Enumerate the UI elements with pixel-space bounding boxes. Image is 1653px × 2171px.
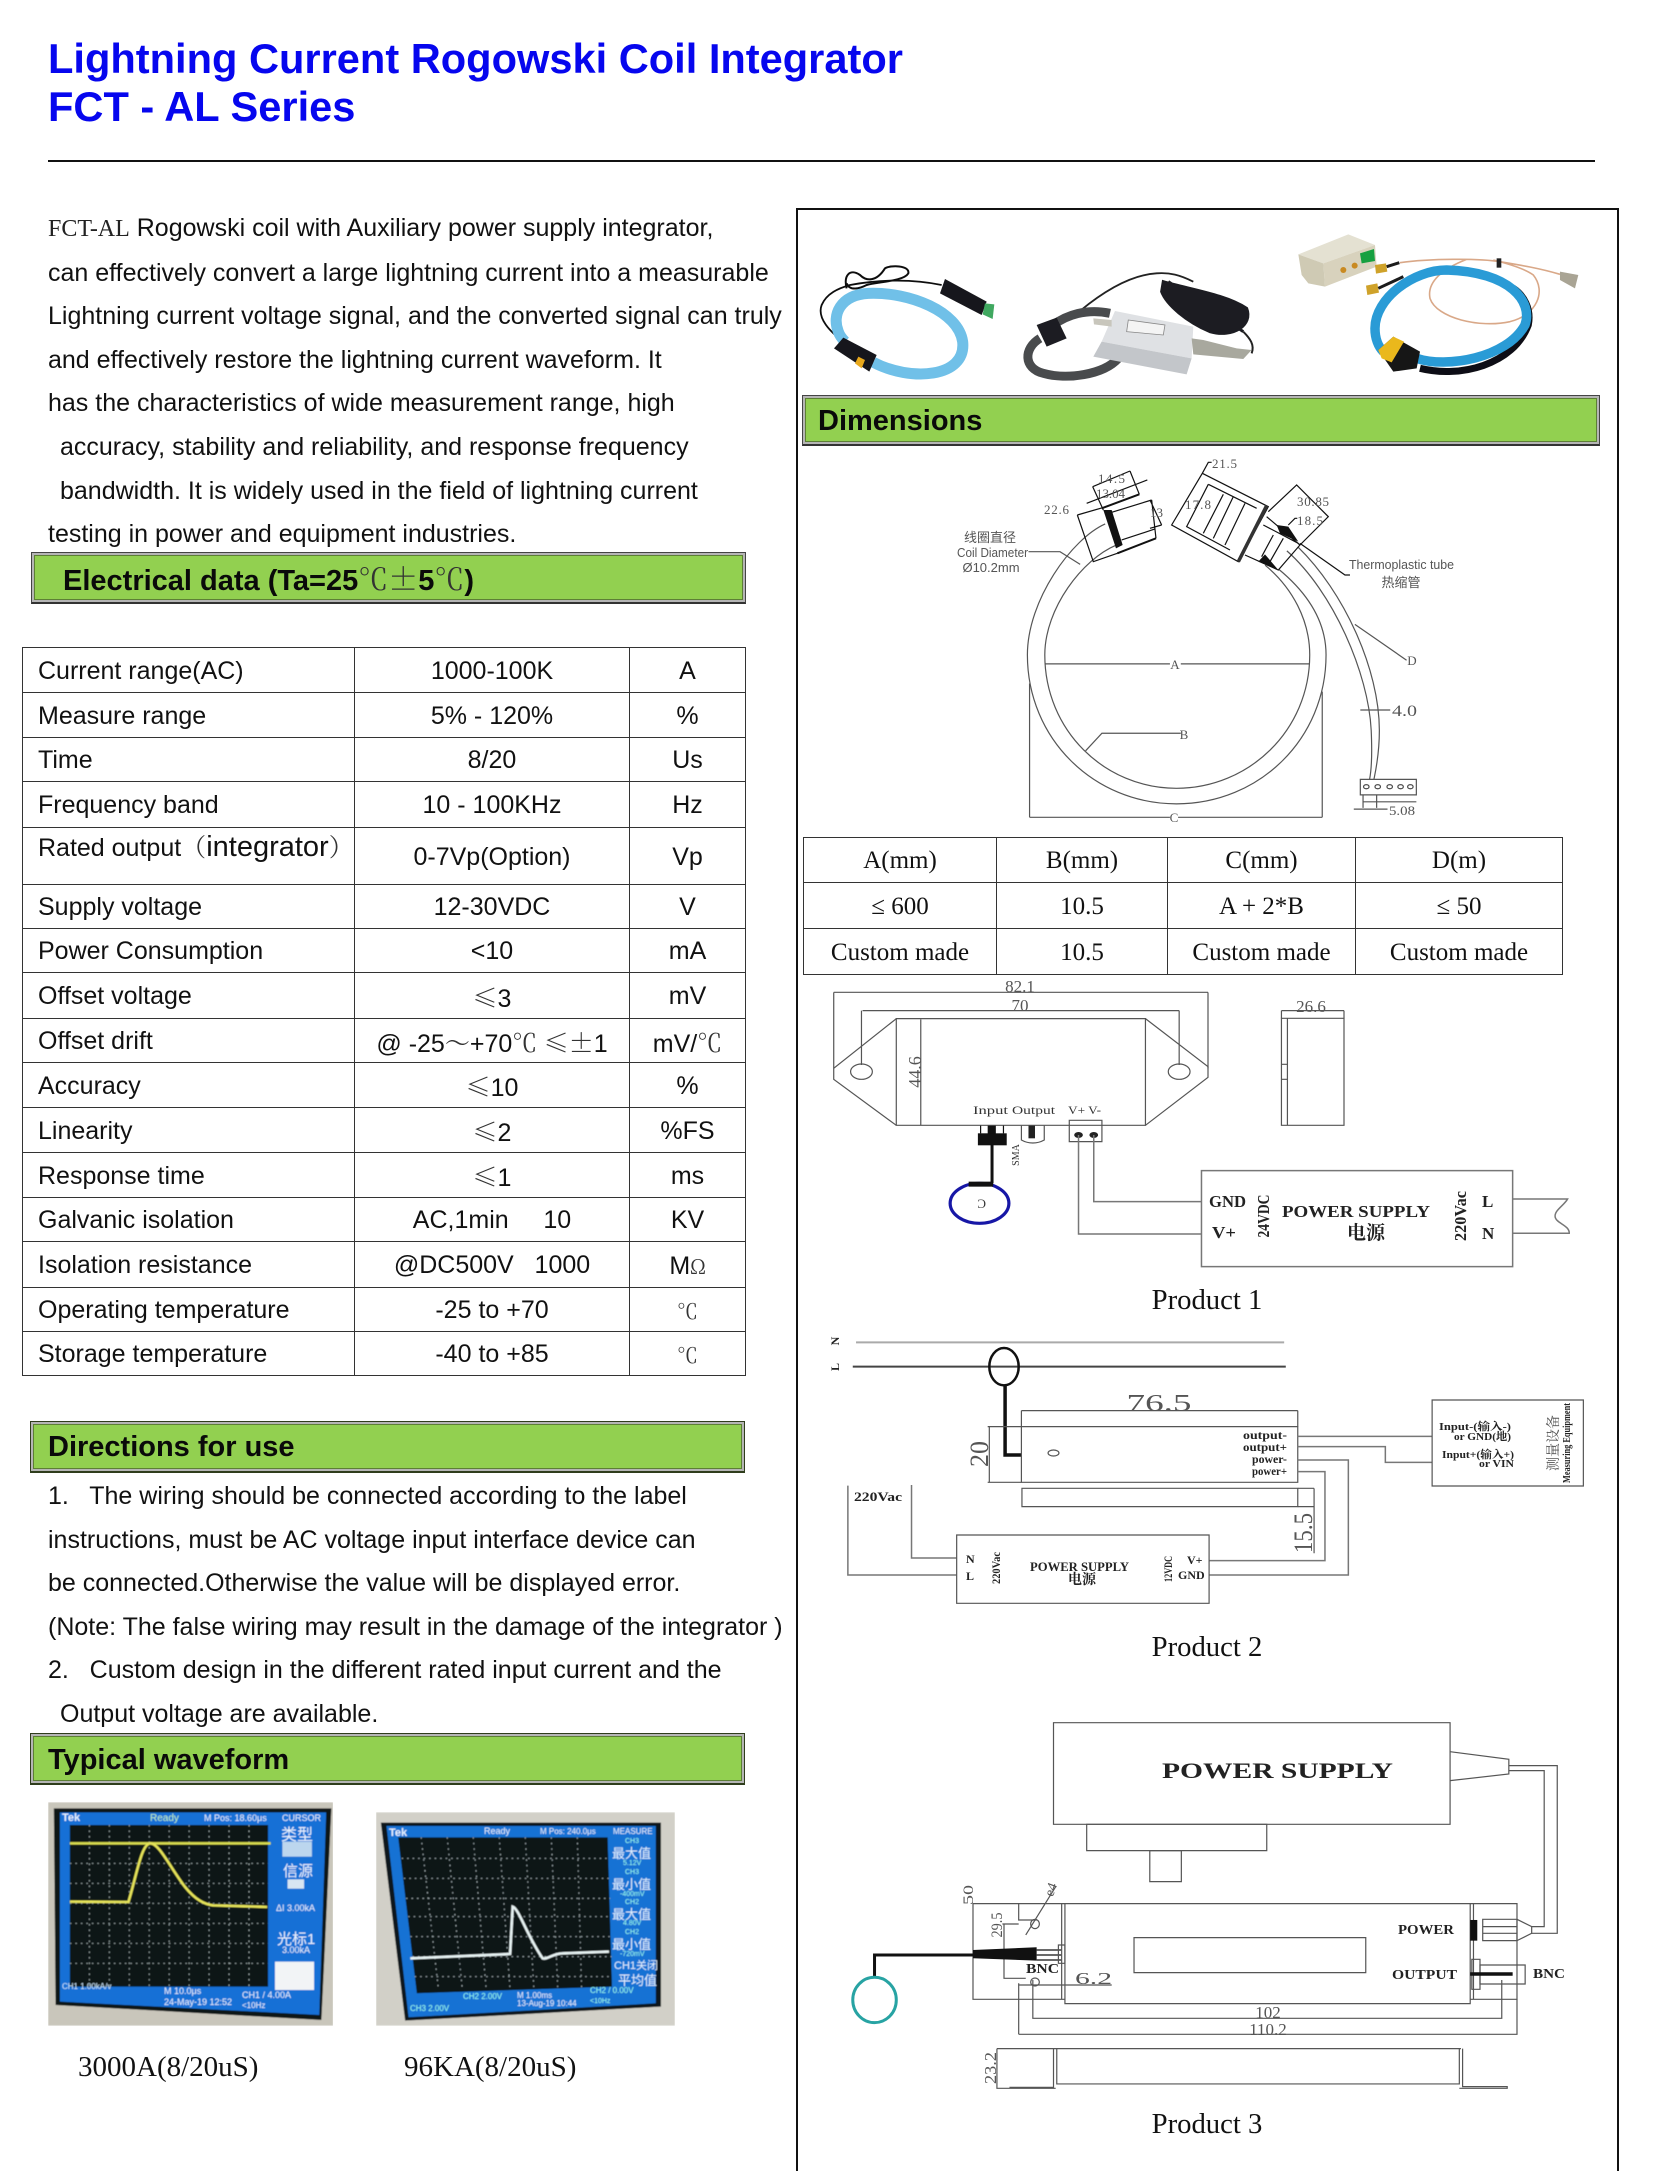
- product 1 wiring diagram: GND: [1209, 1192, 1246, 1211]
- product 2 wiring diagram: or GND(地): [1454, 1429, 1511, 1443]
- ring coil dimension drawing: 14.5: [1098, 471, 1125, 486]
- table: electrical data: Supply voltage: [38, 893, 202, 921]
- table: electrical data: Hz: [672, 791, 703, 819]
- product 1 wiring diagram: L: [1482, 1192, 1493, 1211]
- table: coil dimensions: D(m): [1432, 847, 1486, 874]
- product 1 wiring diagram: Input: [973, 1103, 1009, 1117]
- table: electrical data: V: [679, 893, 696, 921]
- table: electrical data: ≤3: [473, 978, 511, 1014]
- oscilloscope photo: 3000A waveform: [48, 1802, 333, 2026]
- oscilloscope photo: 96KA waveform: 最大值: [612, 1846, 651, 1861]
- table: coil dimensions: A + 2*B: [1219, 892, 1304, 920]
- product 1 wiring diagram: 220Vac: [1451, 1191, 1470, 1241]
- ring coil dimension drawing: Thermoplastic tube: [1349, 557, 1454, 572]
- ring coil dimension drawing: B: [1180, 727, 1189, 742]
- table: coil dimensions: 10.5: [1060, 938, 1104, 966]
- product 2 wiring diagram: 15.5: [1289, 1513, 1318, 1553]
- product 2 wiring diagram: GND: [1178, 1568, 1205, 1582]
- product 3 wiring diagram: 29.5: [989, 1912, 1006, 1938]
- table: electrical data: ℃: [677, 1340, 698, 1370]
- table: electrical data: 5% - 120%: [431, 702, 553, 730]
- oscilloscope photo: 3000A waveform: Tek: [62, 1812, 81, 1824]
- table: electrical data: Storage temperature: [38, 1340, 267, 1368]
- oscilloscope photo: 3000A waveform: 3.00kA: [282, 1945, 310, 1955]
- ring coil dimension drawing: 30.85: [1297, 494, 1329, 509]
- product 3 wiring diagram: 102: [1255, 2003, 1281, 2022]
- oscilloscope photo: 3000A waveform: CH1 1.00kA/v: [62, 1982, 111, 1991]
- table: electrical data: 1000-100K: [431, 656, 553, 684]
- oscilloscope photo: 96KA waveform: 5.12V: [623, 1860, 642, 1867]
- table: coil dimensions: Custom made: [831, 938, 969, 966]
- table: electrical data: AC,1min 10: [413, 1206, 571, 1234]
- oscilloscope photo: 96KA waveform: CH3 2.00V: [410, 2004, 450, 2013]
- oscilloscope photo: 3000A waveform: ΔI 3.00kA: [276, 1903, 315, 1913]
- table: electrical data: MΩ: [669, 1250, 706, 1280]
- oscilloscope photo: 96KA waveform: CH3: [625, 1838, 639, 1845]
- table: coil dimensions: C(mm): [1225, 847, 1298, 874]
- table: electrical data: Response time: [38, 1162, 205, 1190]
- ring coil dimension drawing: 13.04: [1096, 486, 1126, 501]
- caption: 3000A: 3000A(8/20uS): [78, 2051, 258, 2083]
- table: electrical data: Accuracy: [38, 1072, 141, 1100]
- oscilloscope photo: 96KA waveform: M 1.00ms: [517, 1991, 552, 2000]
- product 2 wiring diagram: power+: [1252, 1464, 1287, 1478]
- product 2 wiring diagram: N: [966, 1552, 975, 1566]
- ring coil dimension drawing: A: [1170, 657, 1180, 672]
- table: electrical data: <10: [471, 937, 513, 965]
- oscilloscope photo: 3000A waveform: 24-May-19 12:52: [164, 1997, 232, 2007]
- heading: typical waveform: Typical waveform: [48, 1744, 289, 1776]
- product 2 wiring diagram: V+: [1187, 1553, 1203, 1567]
- heading: dimensions: Dimensions: [818, 405, 982, 437]
- table: electrical data: Offset voltage: [38, 982, 192, 1010]
- oscilloscope photo: 96KA waveform: 最小值: [612, 1877, 651, 1892]
- product 3 wiring diagram: 110.2: [1249, 2020, 1287, 2039]
- ring coil dimension drawing: 22.6: [1044, 502, 1070, 517]
- product 3 wiring diagram: 6.2: [1075, 1969, 1112, 1988]
- product 3 wiring diagram: BNC: [1026, 1962, 1059, 1977]
- table: electrical data: 10 - 100KHz: [423, 791, 561, 819]
- ring coil dimension drawing: C: [1170, 810, 1178, 825]
- oscilloscope photo: 3000A waveform: CURSOR: [282, 1813, 322, 1823]
- table: electrical data: Galvanic isolation: [38, 1206, 234, 1234]
- table: electrical data: Vp: [672, 842, 703, 870]
- table: electrical data: Isolation resistance: [38, 1251, 252, 1279]
- ring coil dimension drawing: 热缩管: [1381, 575, 1421, 590]
- table: electrical data: ms: [671, 1162, 704, 1190]
- table: electrical data: [22, 647, 746, 1376]
- product 3 wiring diagram: POWER SUPPLY: [1162, 1758, 1393, 1783]
- product 3 wiring diagram: POWER: [1398, 1923, 1455, 1938]
- table: electrical data: Rated output（integrator）: [38, 828, 354, 864]
- table: electrical data: 0-7Vp(Option): [413, 842, 571, 870]
- product 1 wiring diagram: V+ V-: [1068, 1103, 1101, 1117]
- ring coil dimension drawing: 线圈直径: [964, 530, 1016, 545]
- oscilloscope photo: 96KA waveform: Ready: [484, 1826, 511, 1836]
- product 1 wiring diagram: 26.6: [1296, 997, 1326, 1016]
- table: electrical data: %: [676, 1072, 699, 1100]
- product 1 wiring diagram: 82.1: [1005, 977, 1035, 996]
- heading: electrical data: Electrical data (Ta=25℃±5℃): [63, 555, 474, 599]
- product 1 wiring diagram: POWER SUPPLY: [1282, 1202, 1430, 1221]
- table: coil dimensions: ≤ 50: [1436, 892, 1481, 920]
- product photo 1: light blue coil: [821, 266, 994, 374]
- product 3 wiring diagram: [853, 1723, 1565, 2088]
- product 1 wiring diagram: [834, 977, 1569, 1267]
- product 2 wiring diagram: 20: [965, 1441, 994, 1467]
- table: electrical data: ≤1: [473, 1158, 511, 1194]
- product photo 3: blue coil with box and BNC: [1298, 234, 1578, 372]
- product photo 2: grey module with cable: [1028, 273, 1253, 376]
- oscilloscope photo: 3000A waveform: 类型: [281, 1826, 313, 1844]
- ring coil dimension drawing: 5.08: [1389, 803, 1415, 818]
- product 1 wiring diagram: C: [977, 1196, 986, 1211]
- heading: typical waveform: [30, 1733, 745, 1785]
- product 2 wiring diagram: Input+(输入+): [1442, 1447, 1514, 1461]
- caption: product 2: Product 2: [1152, 1631, 1262, 1663]
- oscilloscope photo: 96KA waveform: Tek: [389, 1827, 408, 1839]
- ring coil dimension drawing: 18.5: [1297, 513, 1323, 528]
- oscilloscope photo: 96KA waveform: CH3: [625, 1869, 639, 1876]
- table: electrical data: mA: [669, 937, 706, 965]
- table: electrical data: Current range(AC): [38, 656, 244, 684]
- table: electrical data: 8/20: [468, 746, 516, 774]
- product 2 wiring diagram: or VIN: [1479, 1458, 1514, 1470]
- product 2 wiring diagram: POWER SUPPLY: [1030, 1559, 1130, 1574]
- text block: introduction: FCT-AL Rogowski coil with Auxiliary power supply integrator, can effectively convert a large lightning current into a measurable Lightning current voltage signal, and the converted signal can truly and effectively restore the lightning current waveform. It has the characteristics of wide measurement range, high accuracy, stability and reliability, and response frequency bandwidth. It is widely used in the field of lightning current testing in power and equipment industries.: [48, 214, 782, 548]
- product 1 wiring diagram: 70: [1012, 996, 1028, 1015]
- product 2 wiring diagram: output-: [1243, 1428, 1287, 1442]
- oscilloscope photo: 3000A waveform: M Pos: 18.60μs: [204, 1813, 267, 1823]
- oscilloscope photo: 96KA waveform: [376, 1812, 675, 2026]
- product 1 wiring diagram: 44.6: [905, 1056, 925, 1088]
- product 2 wiring diagram: 220Vac: [989, 1551, 1003, 1584]
- oscilloscope photo: 96KA waveform: 最大值: [612, 1907, 651, 1922]
- product 2 wiring diagram: Measuring Equipment: [1561, 1403, 1573, 1483]
- oscilloscope photo: 3000A waveform: 信源: [283, 1863, 313, 1880]
- oscilloscope photo: 96KA waveform: 平均值: [618, 1973, 657, 1988]
- ring coil dimension drawing: Ø10.2mm: [962, 560, 1020, 575]
- product 2 wiring diagram: 220Vac: [854, 1489, 902, 1504]
- oscilloscope photo: 96KA waveform: M Pos: 240.0μs: [540, 1827, 596, 1836]
- table: coil dimensions: B(mm): [1046, 847, 1118, 874]
- heading: dimensions: [802, 395, 1600, 446]
- table: coil dimensions: 10.5: [1060, 892, 1104, 920]
- oscilloscope photo: 96KA waveform: CH2 / 0.00V: [590, 1986, 634, 1995]
- product 2 wiring diagram: L: [828, 1363, 842, 1371]
- table: electrical data: %: [676, 702, 699, 730]
- title: [48, 35, 903, 130]
- product 2 wiring diagram: 测量设备: [1546, 1415, 1562, 1471]
- oscilloscope photo: 3000A waveform: Ready: [150, 1813, 179, 1824]
- title: FCT - AL Series: [48, 83, 355, 130]
- caption: product 1: Product 1: [1152, 1284, 1262, 1316]
- caption: product 3: Product 3: [1152, 2108, 1262, 2140]
- product 1 wiring diagram: 电源: [1347, 1222, 1386, 1244]
- title: Lightning Current Rogowski Coil Integrator: [48, 35, 903, 82]
- table: electrical data: mV: [669, 982, 706, 1010]
- oscilloscope photo: 96KA waveform: -400mV: [620, 1891, 645, 1898]
- product 2 wiring diagram: N: [828, 1336, 842, 1345]
- table: electrical data: Measure range: [38, 702, 206, 730]
- table: electrical data: -25 to +70: [435, 1296, 549, 1324]
- product 2 wiring diagram: [828, 1336, 1583, 1603]
- oscilloscope photo: 3000A waveform: <10Hz: [242, 2001, 265, 2010]
- oscilloscope photo: 96KA waveform: 13-Aug-19 10:44: [517, 1999, 577, 2008]
- product 2 wiring diagram: Input-(输入-): [1439, 1419, 1511, 1433]
- oscilloscope photo: 96KA waveform: CH2: [625, 1929, 639, 1936]
- table: coil dimensions: ≤ 600: [871, 892, 929, 920]
- oscilloscope photo: 96KA waveform: MEASURE: [613, 1827, 653, 1836]
- product 2 wiring diagram: 12VDC: [1161, 1556, 1175, 1582]
- product 1 wiring diagram: Output: [1012, 1103, 1056, 1117]
- table: coil dimensions: Custom made: [1192, 938, 1331, 966]
- product 3 wiring diagram: 50: [961, 1885, 977, 1905]
- product 1 wiring diagram: 24VDC: [1254, 1194, 1273, 1238]
- oscilloscope photo: 96KA waveform: <10Hz: [590, 1998, 611, 2005]
- heading: electrical data: [31, 552, 746, 604]
- product 2 wiring diagram: output+: [1243, 1440, 1287, 1454]
- product 3 wiring diagram: OUTPUT: [1392, 1968, 1458, 1983]
- heading: directions for use: [30, 1421, 745, 1473]
- ring coil dimension drawing: 21.5: [1212, 456, 1237, 471]
- oscilloscope photo: 96KA waveform: CH1关闭: [614, 1958, 658, 1972]
- product 3 wiring diagram: e4: [1042, 1881, 1061, 1899]
- table: coil dimensions: [803, 837, 1563, 975]
- oscilloscope photo: 3000A waveform: M 10.0μs: [164, 1986, 202, 1996]
- table: electrical data: Time: [38, 746, 93, 774]
- table: electrical data: Offset drift: [38, 1027, 153, 1055]
- oscilloscope photo: 96KA waveform: 最小值: [612, 1937, 651, 1952]
- product 2 wiring diagram: 76.5: [1126, 1391, 1192, 1417]
- text block: directions: 1. The wiring should be connected according to the label instructions, must be AC voltage input interface device can be connected.Otherwise the value will be displayed error. (Note: The false wiring may result in the damage of the integrator ) 2. Custom design in the different rated input current and the Output voltage are available.: [48, 1482, 783, 1728]
- table: electrical data: @ -25～+70℃ ≤±1: [376, 1024, 608, 1060]
- product 1 wiring diagram: N: [1482, 1224, 1495, 1243]
- product 2 wiring diagram: power-: [1252, 1452, 1287, 1466]
- table: electrical data: %FS: [660, 1116, 715, 1144]
- oscilloscope photo: 96KA waveform: CH2 2.00V: [463, 1992, 503, 2001]
- product 3 wiring diagram: 23.2: [981, 2052, 1000, 2084]
- oscilloscope photo: 3000A waveform: 光标1: [277, 1931, 315, 1948]
- ring coil dimension drawing: 4.0: [1392, 703, 1417, 720]
- table: electrical data: Power Consumption: [38, 937, 263, 965]
- table: coil dimensions: Custom made: [1390, 938, 1528, 966]
- oscilloscope photo: 96KA waveform: -720mV: [620, 1951, 645, 1958]
- ring coil dimension drawing: Coil Diameter: [957, 545, 1029, 560]
- ring coil dimension drawing: 17.8: [1185, 497, 1211, 512]
- oscilloscope photo: 3000A waveform: CH1 / 4.00A: [242, 1990, 291, 2000]
- oscilloscope photo: 96KA waveform: CH2: [625, 1899, 639, 1906]
- product 1 wiring diagram: V+: [1212, 1223, 1236, 1242]
- table: electrical data: mV/℃: [653, 1024, 722, 1060]
- table: electrical data: Us: [672, 746, 703, 774]
- table: electrical data: Frequency band: [38, 791, 219, 819]
- table: electrical data: ≤2: [473, 1113, 511, 1149]
- product 1 wiring diagram: SMA: [1011, 1143, 1022, 1166]
- table: electrical data: ≤10: [466, 1068, 518, 1104]
- table: electrical data: KV: [671, 1206, 704, 1234]
- table: electrical data: ℃: [677, 1296, 698, 1326]
- panel: dimensions and products: [796, 208, 1619, 2171]
- ring coil dimension drawing: 13: [1150, 505, 1163, 520]
- product 2 wiring diagram: 电源: [1068, 1571, 1097, 1588]
- product 2 wiring diagram: L: [966, 1569, 974, 1583]
- table: electrical data: Linearity: [38, 1116, 132, 1144]
- table: electrical data: 12-30VDC: [434, 893, 550, 921]
- heading: directions for use: Directions for use: [48, 1431, 295, 1463]
- table: electrical data: -40 to +85: [435, 1340, 549, 1368]
- oscilloscope photo: 96KA waveform: 4.80V: [623, 1920, 642, 1927]
- ring coil dimension drawing: D: [1407, 653, 1417, 668]
- caption: 96KA: 96KA(8/20uS): [404, 2051, 576, 2083]
- table: electrical data: @DC500V 1000: [394, 1251, 590, 1279]
- table: electrical data: A: [679, 656, 696, 684]
- table: electrical data: Operating temperature: [38, 1296, 290, 1324]
- ring coil dimension drawing: [957, 456, 1454, 825]
- product 3 wiring diagram: BNC: [1533, 1967, 1565, 1982]
- table: coil dimensions: A(mm): [863, 847, 937, 874]
